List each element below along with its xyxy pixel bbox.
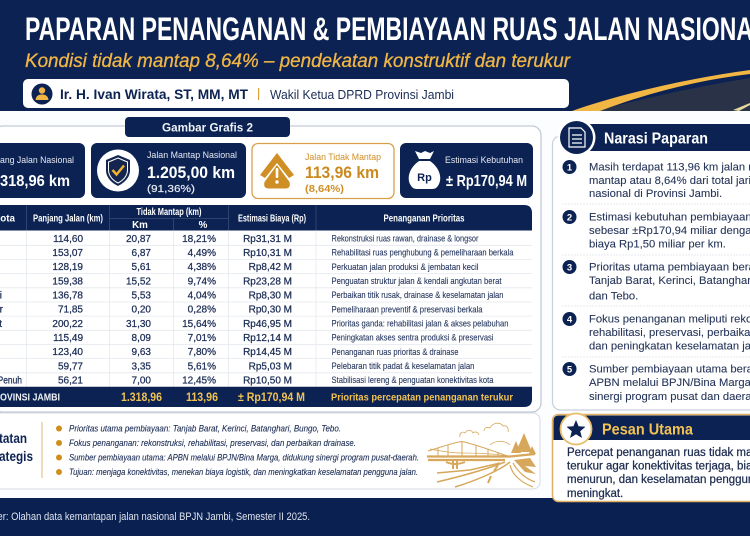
table row 10: 3,35 bbox=[132, 361, 151, 372]
icon: star bbox=[566, 420, 586, 438]
badge: Gambar Grafis 2 bbox=[125, 117, 290, 137]
stat card: estimasi kebutuhan: ± Rp170,94 M bbox=[446, 173, 527, 190]
narasi item 2 bbox=[562, 210, 750, 250]
table row 9: Penanganan ruas prioritas & drainase bbox=[332, 347, 458, 357]
table row 8: 8,09 bbox=[132, 333, 151, 344]
narasi item 3: 3 bbox=[567, 262, 572, 274]
table row 6 bbox=[0, 304, 483, 316]
table row 2: Rehabilitasi ruas penghubung & pemeliharaan berkala bbox=[332, 248, 514, 258]
table row 4: 9,74% bbox=[188, 276, 216, 287]
stat card: panjang jalan nasional: ang Jalan Nasional bbox=[0, 155, 74, 166]
presenter role: Wakil Ketua DPRD Provinsi Jambi bbox=[270, 87, 454, 102]
table row 1 bbox=[53, 234, 478, 245]
stat card: panjang jalan nasional: 318,96 km bbox=[0, 173, 70, 190]
table header bbox=[0, 205, 532, 231]
narasi header band bbox=[558, 118, 750, 156]
subtitle: Kondisi tidak mantap 8,64% – pendekatan konstruktif dan terukur bbox=[25, 50, 571, 72]
table row 2: 153,07 bbox=[52, 248, 83, 259]
table row 11: Rp10,50 M bbox=[243, 376, 292, 386]
stat card: jalan tidak mantap: (8,64%) bbox=[305, 183, 344, 195]
table row 8: 7,01% bbox=[188, 333, 216, 344]
narasi item 4 bbox=[562, 312, 750, 352]
icon: warning triangle bbox=[260, 153, 294, 188]
table row 6: 71,85 bbox=[58, 305, 83, 316]
stat card: jalan mantap: (91,36%) bbox=[147, 183, 195, 195]
table row 11: 56,21 bbox=[58, 376, 83, 386]
heading: catatan strategis: tatan bbox=[0, 430, 27, 446]
narasi item 2: 2 bbox=[567, 212, 572, 224]
table row 7: 31,30 bbox=[126, 319, 151, 330]
pesan utama header: Pesan Utama bbox=[602, 422, 693, 438]
table row 8: Rp12,14 M bbox=[243, 333, 292, 344]
panel: gambar grafis bbox=[0, 117, 541, 412]
table row 8 bbox=[53, 333, 494, 344]
table row 9: 9,63 bbox=[132, 347, 151, 358]
table row 3: Perkuatan jalan produksi & jembatan kecil bbox=[332, 262, 478, 272]
table row 10 bbox=[58, 361, 474, 372]
table row 1: 18,21% bbox=[182, 234, 216, 245]
stat card: jalan mantap: Jalan Mantap Nasional bbox=[147, 150, 237, 161]
table row 7: Prioritas ganda: rehabilitasi jalan & akses pelabuhan bbox=[332, 318, 508, 328]
stat card: jalan tidak mantap bbox=[252, 144, 394, 198]
table row 6: Rp0,30 M bbox=[249, 305, 292, 316]
heading: catatan strategis bbox=[0, 430, 33, 464]
table row 11: 12,45% bbox=[182, 376, 216, 386]
table total row: 1.318,96 bbox=[121, 390, 162, 404]
table row 4: 159,38 bbox=[52, 276, 83, 287]
table row 2 bbox=[52, 248, 514, 259]
table row 10: 59,77 bbox=[58, 361, 83, 372]
table row 3: 4,38% bbox=[188, 262, 216, 273]
strategic notes list bbox=[56, 424, 419, 478]
table row 8: 115,49 bbox=[53, 333, 83, 344]
table row 5 bbox=[0, 290, 504, 302]
stat card: jalan mantap bbox=[91, 143, 246, 198]
table row 11: 7,00 bbox=[132, 376, 151, 386]
pesan utama body: meningkat. bbox=[567, 488, 623, 500]
table total row: ± Rp170,94 M bbox=[238, 390, 305, 404]
table: data ruas jalan bbox=[0, 205, 532, 407]
narasi item 3 bbox=[562, 260, 750, 302]
table header: % bbox=[199, 220, 208, 231]
strategic notes list: Tujuan: menjaga konektivitas, menekan biaya logistik, dan meningkatkan keselamatan pengguna jalan. bbox=[69, 467, 418, 478]
table row 5: 4,04% bbox=[188, 290, 216, 302]
table row 7: 200,22 bbox=[52, 319, 83, 330]
narasi item 3: dan Tebo. bbox=[589, 290, 638, 302]
table row 6: Pemeliharaan preventif & preservasi berkala bbox=[332, 304, 483, 314]
table row 7 bbox=[0, 318, 508, 330]
table row 4: 15,52 bbox=[126, 276, 151, 287]
panel: narasi paparan bbox=[552, 118, 750, 410]
pesan utama header bbox=[554, 414, 750, 444]
table header: Tidak Mantap (km) bbox=[136, 207, 202, 218]
table row 5: Rp8,30 M bbox=[249, 290, 292, 302]
table total row bbox=[0, 387, 532, 407]
table row 1: 114,60 bbox=[53, 234, 83, 245]
table row 9: 123,40 bbox=[52, 347, 83, 358]
icon: shield bbox=[97, 150, 139, 192]
table row 2: 4,49% bbox=[188, 248, 216, 259]
table row 1: Rekonstruksi ruas rawan, drainase & longsor bbox=[332, 234, 478, 244]
table row 7: 15,64% bbox=[182, 319, 216, 330]
icon: document bbox=[569, 128, 585, 147]
table header: Km bbox=[132, 220, 148, 231]
stat card: estimasi kebutuhan bbox=[400, 143, 533, 198]
panel: pesan utama bbox=[552, 414, 750, 502]
table row 6: 0,20 bbox=[132, 305, 151, 316]
table row 10: 5,61% bbox=[188, 361, 216, 372]
narasi item 1: nasional di Provinsi Jambi. bbox=[589, 188, 722, 200]
table row 3 bbox=[52, 262, 478, 273]
table total row: Prioritas percepatan penanganan terukur bbox=[331, 392, 513, 404]
narasi item 2: biaya Rp1,50 miliar per km. bbox=[589, 238, 726, 250]
table row 11 bbox=[0, 375, 494, 386]
stat card: jalan tidak mantap: Jalan Tidak Mantap bbox=[305, 152, 381, 163]
table row 9 bbox=[52, 347, 458, 358]
presenter name bar bbox=[23, 79, 569, 108]
table row 1: 20,87 bbox=[126, 234, 151, 245]
table row 9: Rp14,45 M bbox=[243, 347, 292, 358]
strategic notes list: Sumber pembiayaan utama: APBN melalui BPJN/Bina Marga, didukung sinergi program pusat-daerah. bbox=[69, 453, 419, 464]
footer band bbox=[0, 498, 750, 536]
stat card: jalan tidak mantap: 113,96 km bbox=[305, 163, 379, 182]
table row 9: 7,80% bbox=[188, 347, 216, 358]
stat card: panjang jalan nasional bbox=[0, 143, 85, 198]
table row 3: Rp8,42 M bbox=[249, 262, 292, 273]
narasi item 1 bbox=[562, 160, 750, 200]
table row 10: Pelebaran titik padat & keselamatan jalan bbox=[332, 361, 474, 371]
narasi item 4: 4 bbox=[567, 314, 573, 326]
table row 2: Rp10,31 M bbox=[243, 248, 292, 259]
strategic notes list: Prioritas utama pembiayaan: Tanjab Barat, Kerinci, Batanghari, Bungo, Tebo. bbox=[69, 424, 341, 435]
panel: catatan strategis bbox=[0, 413, 540, 489]
narasi header band: Narasi Paparan bbox=[604, 130, 708, 148]
table row 5: 136,78 bbox=[52, 290, 83, 302]
header banner bbox=[0, 0, 750, 111]
table row 4 bbox=[52, 276, 502, 287]
table row 4: Penguatan struktur jalan & kendali angkutan berat bbox=[332, 276, 502, 286]
table row 4: Rp23,28 M bbox=[243, 276, 292, 287]
table header: Penanganan Prioritas bbox=[384, 214, 465, 224]
table row 5: 5,53 bbox=[132, 290, 151, 302]
icon: money bag: Rp bbox=[417, 172, 432, 184]
table total row: OVINSI JAMBI bbox=[0, 392, 60, 404]
illustration: bridge and road bbox=[427, 423, 536, 487]
heading: catatan strategis: ategis bbox=[0, 448, 33, 464]
badge: Gambar Grafis 2: Gambar Grafis 2 bbox=[162, 120, 253, 134]
table row 2: 6,87 bbox=[132, 248, 151, 259]
table header: Estimasi Biaya (Rp) bbox=[238, 214, 306, 224]
table row 11: Stabilisasi lereng & penguatan konektivitas kota bbox=[332, 375, 494, 385]
table row 6: 0,28% bbox=[188, 305, 216, 316]
stat card: jalan mantap: 1.205,00 km bbox=[147, 163, 235, 182]
table row 10: Rp5,03 M bbox=[249, 361, 292, 372]
pesan utama body bbox=[567, 447, 750, 500]
strategic notes list: Fokus penanganan: rekonstruksi, rehabilitasi, preservasi, dan perbaikan drainase. bbox=[69, 438, 356, 449]
presenter name: Ir. H. Ivan Wirata, ST, MM, MT bbox=[60, 87, 249, 102]
table total row: 113,96 bbox=[186, 390, 218, 404]
stat card: estimasi kebutuhan: Estimasi Kebutuhan bbox=[445, 155, 523, 166]
table row 8: Peningkatan akses sentra produksi & preservasi bbox=[332, 333, 494, 343]
narasi item 1: 1 bbox=[567, 162, 573, 174]
narasi item 5: 5 bbox=[567, 364, 573, 376]
table row 3: 128,19 bbox=[52, 262, 83, 273]
table header: Panjang Jalan (km) bbox=[33, 214, 103, 224]
table row 7: Rp46,95 M bbox=[243, 319, 292, 330]
table row 1: Rp31,31 M bbox=[243, 234, 292, 245]
table row 5: Perbaikan titik rusak, drainase & keselamatan jalan bbox=[332, 290, 504, 300]
narasi item 5 bbox=[562, 362, 750, 403]
table row 3: 5,61 bbox=[132, 262, 151, 273]
icon: person bbox=[32, 84, 52, 104]
